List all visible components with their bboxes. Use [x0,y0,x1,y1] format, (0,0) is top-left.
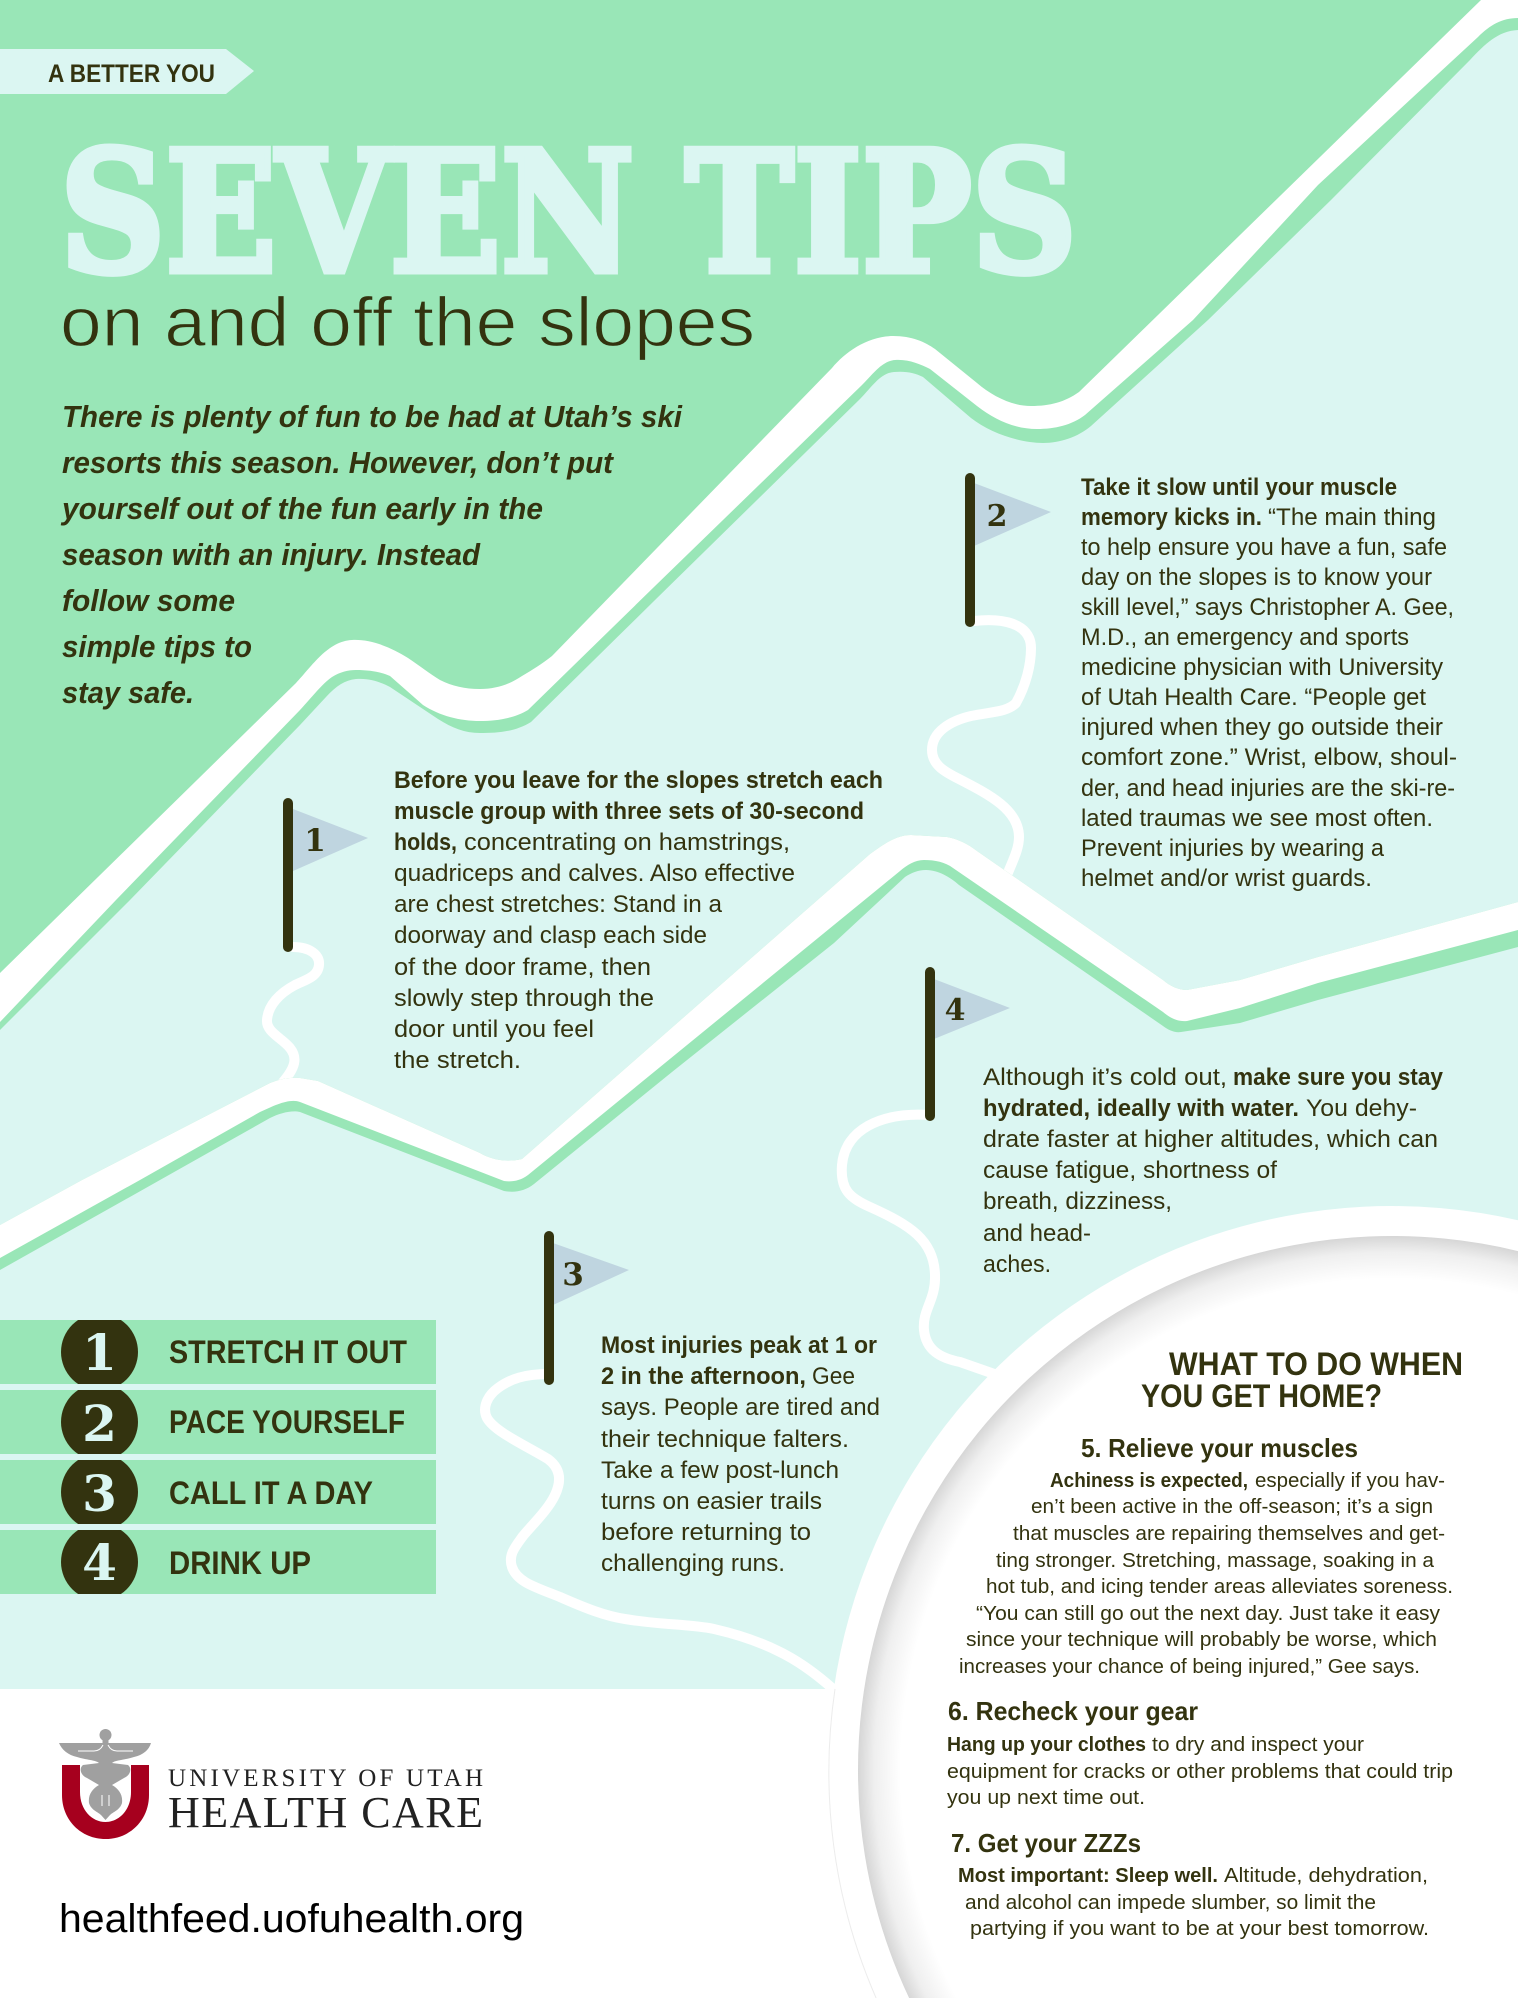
panel heading: WHAT TO DO WHEN [1169,1346,1463,1382]
text block: tip 4: breath, dizziness, [983,1188,1172,1215]
tip 6: to dry and inspect your [1152,1734,1364,1756]
text block: tip 2: of Utah Health Care. “People get [1081,684,1426,711]
item 2: pace yourself: PACE YOURSELF [169,1404,405,1440]
text block: tip 3: 2 in the afternoon, [601,1363,806,1390]
flag 4: 4 [945,993,965,1028]
text block: tip 2: to help ensure you have a fun, safe [1081,534,1447,561]
panel heading [1141,1346,1463,1414]
tip 5: “You can still go out the next day. Just take it easy [976,1603,1440,1625]
item 2: pace yourself: 2 [82,1394,117,1453]
flag 1: 1 [304,823,326,859]
text block: tip 4: make sure you stay [1233,1064,1444,1091]
upper mountain ridge [0,0,1518,1030]
tip 5: especially if you hav- [1255,1470,1445,1492]
text block: tip 1: holds, [394,829,457,856]
text block: tip 3: Most injuries peak at 1 or [601,1332,877,1359]
item 3: call it a day [0,1460,436,1524]
tip 5: hot tub, and icing tender areas alleviates soreness. [986,1576,1453,1598]
intro paragraph [60,399,683,710]
banner: A BETTER YOU: A BETTER YOU [48,60,215,88]
subtitle: on and off the slopes [60,283,755,361]
flag 2 [965,473,1051,627]
text block: tip 4: Although it’s cold out, [983,1064,1227,1091]
text block: tip 4: You dehy- [1306,1095,1417,1122]
text block: tip 4 [983,1064,1444,1278]
text block: tip 1: the stretch. [394,1047,521,1074]
item 3: call it a day: CALL IT A DAY [169,1475,373,1511]
text block: tip 2 [1081,474,1457,892]
flag 3: 3 [562,1257,584,1293]
text block: tip 3: turns on easier trails [601,1488,822,1515]
white bottom band [0,1689,1000,1998]
tip 6 [947,1696,1453,1809]
text block: tip 2: der, and head injuries are the ski-re- [1081,775,1455,802]
ski trails [267,620,1031,1688]
text block: tip 3: challenging runs. [601,1550,785,1577]
logo: University of Utah Health Care [59,1729,483,1839]
text block: tip 4: hydrated, ideally with water. [983,1095,1299,1122]
tip 5: increases your chance of being injured,” Gee says. [959,1656,1420,1678]
text block: tip 2: day on the slopes is to know your [1081,564,1432,591]
text block: tip 2: M.D., an emergency and sports [1081,624,1409,651]
text block: tip 3 [601,1332,880,1577]
tip 6: 6. Recheck your gear [948,1696,1198,1726]
numbered summary list [0,1314,436,1600]
flag 2: 2 [987,499,1007,534]
item 4: drink up [0,1530,436,1594]
text block: tip 1: Before you leave for the slopes stretch each [394,767,883,794]
text block: tip 1 [394,767,883,1074]
item 1: stretch it out: 1 [82,1323,117,1382]
flag 1 [283,798,368,952]
item 1: stretch it out: STRETCH IT OUT [169,1334,407,1370]
wordmark [168,1765,483,1837]
banner: A BETTER YOU [0,49,254,94]
intro paragraph: simple tips to [62,629,252,664]
text block: tip 1: concentrating on hamstrings, [464,829,790,856]
tip 7: and alcohol can impede slumber, so limit the [965,1892,1376,1914]
intro paragraph: yourself out of the fun early in the [60,491,543,526]
item 1: stretch it out [0,1320,436,1384]
tip 5: 5. Relieve your muscles [1081,1433,1358,1463]
item 3: call it a day: 3 [82,1464,117,1523]
text block: tip 1: slowly step through the [394,985,654,1012]
flag 3 [544,1231,629,1385]
panel heading: YOU GET HOME? [1141,1378,1382,1414]
title: SEVEN TIPS: SEVEN TIPS [60,115,1077,311]
text block: tip 2: skill level,” says Christopher A. Gee, [1081,594,1454,621]
text block: tip 1: doorway and clasp each side [394,922,707,949]
tip 6: you up next time out. [947,1787,1145,1809]
tip 6: Hang up your clothes [947,1734,1146,1756]
flag 4 [925,967,1010,1121]
text block: tip 2: Prevent injuries by wearing a [1081,835,1385,862]
text block: tip 1: muscle group with three sets of 30-second [394,798,864,825]
tip 7 [951,1828,1429,1940]
intro paragraph: stay safe. [62,675,194,710]
tip 5: Achiness is expected, [1050,1470,1248,1492]
text block: tip 3: before returning to [601,1519,811,1546]
tip 7: Altitude, dehydration, [1224,1865,1428,1887]
tip 5 [959,1433,1453,1678]
text block: tip 3: says. People are tired and [601,1394,880,1421]
tip 7: partying if you want to be at your best tomorrow. [970,1918,1429,1940]
tip 7: 7. Get your ZZZs [951,1828,1141,1858]
text block: tip 1: door until you feel [394,1016,594,1043]
text block: tip 4: and head- [983,1220,1091,1247]
panel: what to do when you get home [828,1206,1518,1998]
text block: tip 2: lated traumas we see most often. [1081,805,1433,832]
item 2: pace yourself [0,1390,436,1454]
wordmark: HEALTH CARE [168,1788,483,1837]
text block: tip 2: Take it slow until your muscle [1081,474,1397,501]
text block: tip 3: their technique falters. [601,1426,849,1453]
text block: tip 4: drate faster at higher altitudes, which can [983,1126,1438,1153]
text block: tip 4: aches. [983,1251,1051,1278]
intro paragraph: resorts this season. However, don’t put [62,445,615,480]
text block: tip 2: “The main thing [1268,504,1436,531]
text block: tip 3: Take a few post-lunch [601,1457,839,1484]
website url: healthfeed.uofuhealth.org [59,1897,524,1941]
text block: tip 2: comfort zone.” Wrist, elbow, shoul- [1081,744,1457,771]
item 4: drink up: DRINK UP [169,1545,311,1581]
text block: tip 1: quadriceps and calves. Also effective [394,860,795,887]
tip 5: that muscles are repairing themselves and get- [1013,1523,1445,1545]
intro paragraph: There is plenty of fun to be had at Utah’s ski [62,399,683,434]
intro paragraph: follow some [62,583,235,618]
tip 7: Most important: Sleep well. [958,1865,1218,1887]
lower mountain ridge [0,835,1518,1270]
icon: red U with caduceus [59,1729,151,1839]
item 4: drink up: 4 [82,1533,117,1592]
tip 6: equipment for cracks or other problems that could trip [947,1761,1453,1783]
text block: tip 3: Gee [812,1363,855,1390]
tip 5: ting stronger. Stretching, massage, soaking in a [996,1550,1435,1572]
text block: tip 2: memory kicks in. [1081,504,1262,531]
wordmark: UNIVERSITY OF UTAH [168,1765,483,1792]
text block: tip 2: injured when they go outside their [1081,714,1443,741]
text block: tip 1: of the door frame, then [394,954,651,981]
text block: tip 2: helmet and/or wrist guards. [1081,865,1372,892]
intro paragraph: season with an injury. Instead [62,537,481,572]
text block: tip 1: are chest stretches: Stand in a [394,891,723,918]
tip 5: en’t been active in the off-season; it’s a sign [1031,1496,1433,1518]
text block: tip 4: cause fatigue, shortness of [983,1157,1277,1184]
tip 5: since your technique will probably be worse, which [966,1629,1437,1651]
text block: tip 2: medicine physician with University [1081,654,1443,681]
